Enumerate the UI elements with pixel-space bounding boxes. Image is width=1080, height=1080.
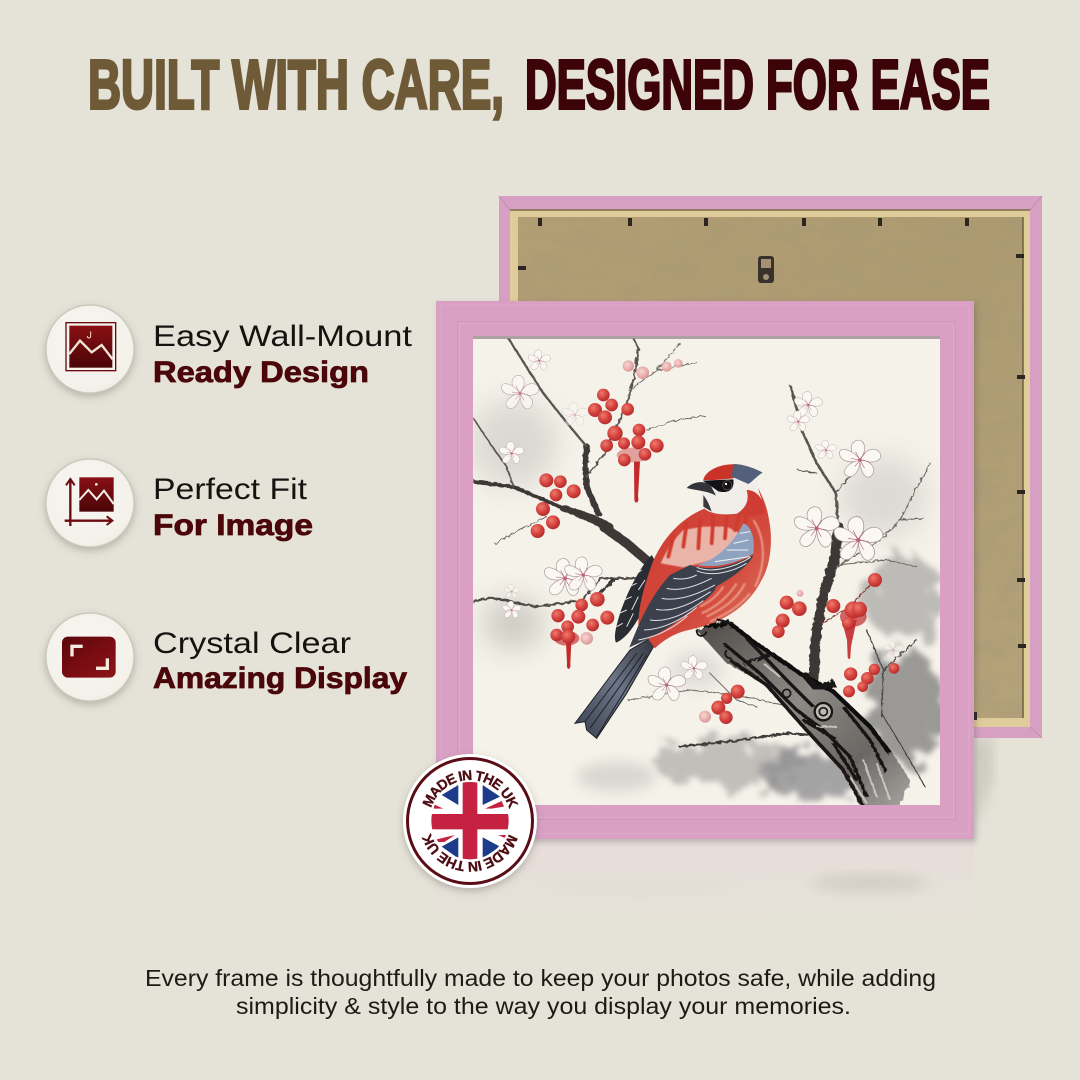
dark wing — [629, 555, 753, 647]
frame shadow — [974, 738, 993, 830]
front frame moulding — [436, 301, 974, 839]
bird body — [638, 485, 771, 648]
bird — [575, 464, 771, 738]
title: BUILT WITH CARE, — [88, 46, 504, 124]
wall hanger — [758, 256, 774, 283]
feature: perfect fit — [46, 459, 313, 547]
feature text 3: Crystal Clear — [153, 627, 351, 660]
feature: crystal clear — [46, 613, 407, 701]
icon: image with dimension arrows — [46, 459, 134, 547]
icon: wall mount picture — [46, 305, 134, 393]
retaining clips — [518, 218, 1026, 720]
feature text 2: Perfect Fit — [153, 473, 308, 506]
back frame moulding — [499, 196, 1042, 738]
bird feet — [697, 619, 733, 658]
blue shoulder patch — [697, 523, 754, 566]
feature text 1: Ready Design — [153, 356, 369, 389]
red ink drips — [554, 448, 867, 669]
badge text: MADE IN THE UK — [422, 770, 518, 810]
closing text: Every frame is thoughtfully made to keep your photos safe, while adding — [145, 965, 936, 991]
closing text: simplicity & style to the way you display your memories. — [236, 993, 851, 1019]
bird head — [704, 485, 762, 514]
frame reflection on surface — [436, 840, 974, 955]
back of frame — [499, 196, 1042, 738]
badge: made in the UK — [400, 754, 540, 894]
pink buds — [580, 359, 803, 723]
feature text 2 — [153, 473, 313, 542]
bird beak — [687, 482, 716, 496]
feature text 1 — [153, 320, 413, 389]
trunk — [697, 620, 910, 807]
feature text 3: Amazing Display — [153, 662, 407, 695]
badge text — [422, 770, 518, 872]
bird primaries — [615, 555, 657, 643]
breast and mantle feathers — [661, 527, 740, 567]
ink washes — [470, 400, 947, 800]
bird tail — [575, 633, 658, 738]
feature text 2: For Image — [153, 509, 313, 542]
blossoms — [500, 350, 903, 701]
backing board — [518, 217, 1023, 718]
union jack — [430, 780, 510, 862]
front of frame — [436, 301, 974, 839]
closing text — [145, 965, 936, 1019]
artwork: bird on blossom branch — [470, 336, 947, 807]
icon: display corners — [46, 613, 134, 701]
feature text 3 — [153, 627, 407, 695]
badge text: MADE IN THE UK — [422, 832, 518, 872]
feature text 1: Easy Wall-Mount — [153, 320, 413, 353]
branches — [473, 338, 930, 787]
bird eye — [723, 481, 732, 490]
feature: easy wall-mount — [46, 305, 413, 393]
berries — [531, 389, 899, 724]
